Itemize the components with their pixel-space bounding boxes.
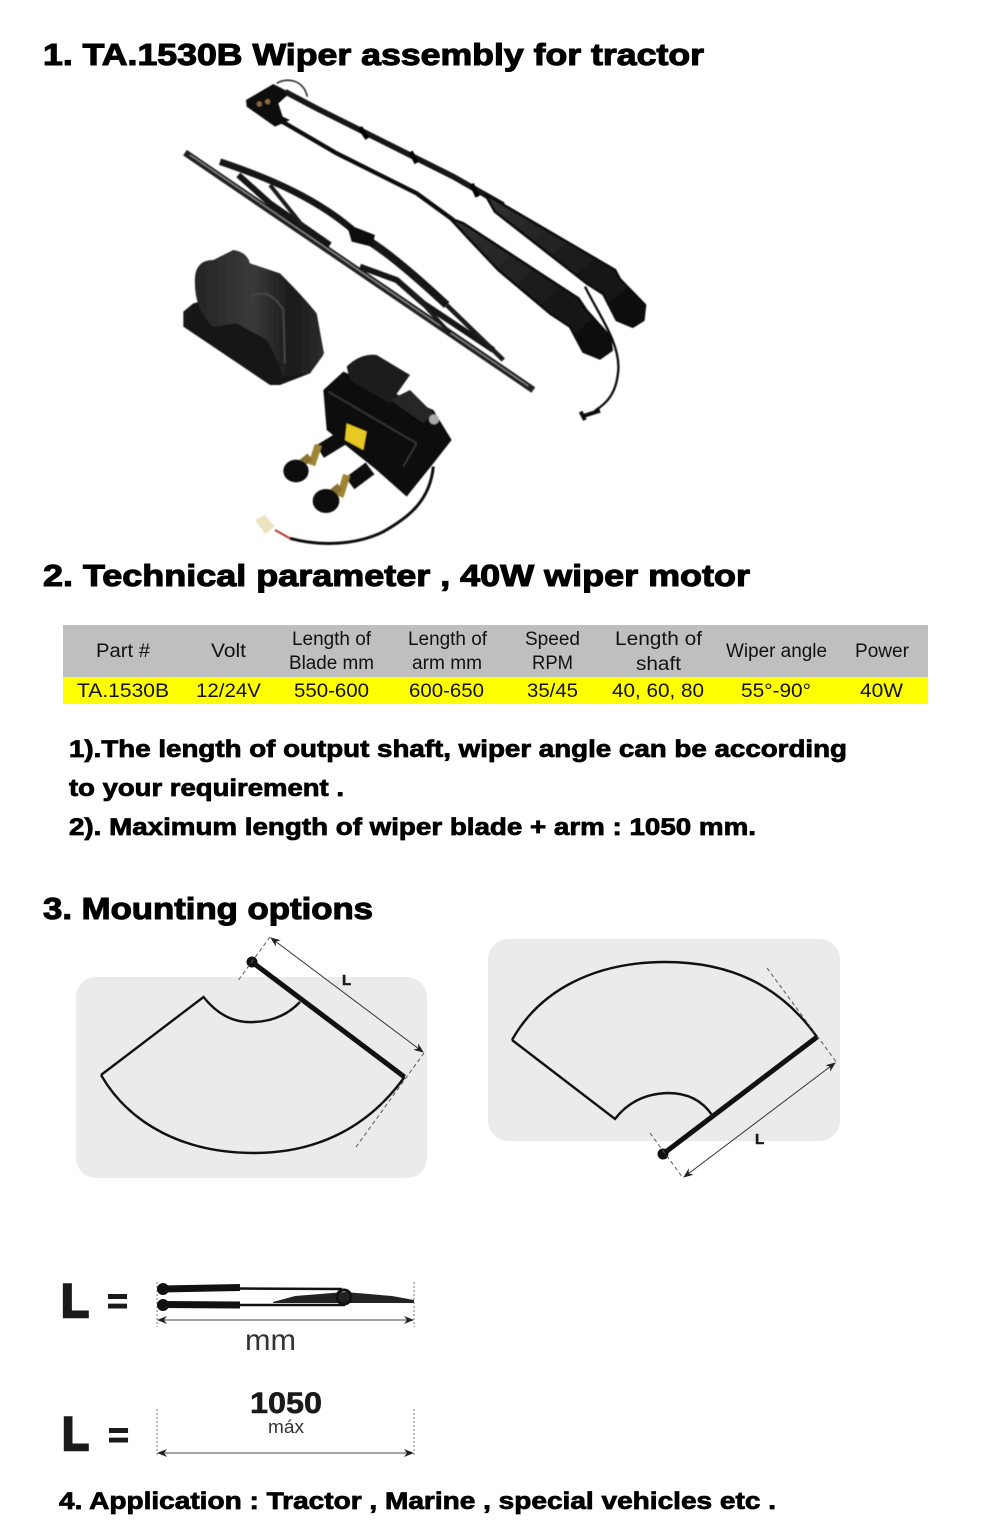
- section 2 heading: 2. Technical parameter , 40W wiper motor: [43, 558, 750, 593]
- dimension arrow: [157, 1409, 414, 1455]
- column headers: shaft: [636, 654, 682, 675]
- lower mounting stud: [313, 468, 370, 513]
- equals sign: =: [108, 1414, 129, 1455]
- notes text block: to your requirement .: [69, 775, 344, 802]
- panel background: [488, 939, 840, 1141]
- column headers: arm mm: [412, 653, 482, 674]
- notes text block: [69, 736, 847, 841]
- L label: L: [342, 972, 351, 989]
- equals sign: =: [107, 1280, 128, 1321]
- table header row: [63, 625, 928, 677]
- wiper silhouette: [157, 1283, 414, 1311]
- panel background: [76, 977, 427, 1178]
- section 3 heading: 3. Mounting options: [43, 891, 373, 926]
- section 4 heading: application: 4. Application : Tractor , Marine , special vehicles etc .: [59, 1488, 776, 1515]
- column headers: Part #: [96, 641, 150, 662]
- wiper motor: [255, 355, 452, 543]
- unit label: mm: [245, 1324, 296, 1357]
- formula: L equals mm: [61, 1274, 414, 1357]
- notes text block: 2). Maximum length of wiper blade + arm : 1050 mm.: [69, 814, 756, 841]
- motor cover: [183, 250, 324, 385]
- column headers: Wiper angle: [726, 641, 827, 662]
- formula: L equals 1050 max: [62, 1387, 414, 1460]
- column headers: Volt: [211, 641, 247, 662]
- L symbol: L: [61, 1274, 89, 1327]
- column headers: Length of: [615, 629, 703, 650]
- column headers: RPM: [532, 653, 573, 674]
- column headers: Length of: [408, 629, 488, 650]
- column headers: Length of: [292, 629, 372, 650]
- row values: 40, 60, 80: [612, 681, 704, 702]
- wiper arm: upper: [285, 92, 645, 327]
- column headers: Power: [855, 641, 910, 662]
- diagram: mounting option right: [488, 939, 840, 1178]
- wiper arm: [658, 1037, 817, 1160]
- row values: 12/24V: [196, 681, 261, 702]
- arm bracket: [246, 80, 307, 127]
- dimension lines: [237, 937, 424, 1147]
- row values: 40W: [860, 681, 903, 702]
- column headers: [96, 629, 910, 675]
- title: section 1 heading: 1. TA.1530B Wiper assembly for tractor: [43, 37, 704, 72]
- wiper arm: lower: [277, 118, 612, 358]
- dimension lines: [650, 968, 837, 1178]
- column headers: Speed: [525, 629, 580, 650]
- row values: TA.1530B: [77, 681, 169, 702]
- row values: [77, 681, 903, 702]
- diagram: mounting option left: [76, 937, 427, 1178]
- L symbol: L: [62, 1407, 89, 1460]
- table data row: [63, 677, 928, 704]
- value: 1050: [250, 1387, 322, 1420]
- row values: 600-650: [409, 681, 484, 702]
- row values: 55°-90°: [741, 681, 811, 702]
- washer hose: [581, 287, 618, 420]
- table: technical parameters: [63, 625, 928, 704]
- wipe sweep area: [101, 997, 404, 1153]
- wiper arm: [246, 956, 404, 1077]
- upper mounting stud: [283, 438, 342, 482]
- row values: 35/45: [527, 681, 578, 702]
- product photo: wiper assembly: [183, 80, 645, 543]
- wiper blade: [185, 153, 533, 390]
- max label: máx: [268, 1417, 304, 1437]
- L label: L: [755, 1131, 764, 1148]
- notes text block: 1).The length of output shaft, wiper angle can be according: [69, 736, 847, 763]
- wipe sweep area: [512, 962, 817, 1119]
- row values: 550-600: [294, 681, 369, 702]
- dimension arrow: [157, 1282, 414, 1327]
- column headers: Blade mm: [289, 653, 374, 674]
